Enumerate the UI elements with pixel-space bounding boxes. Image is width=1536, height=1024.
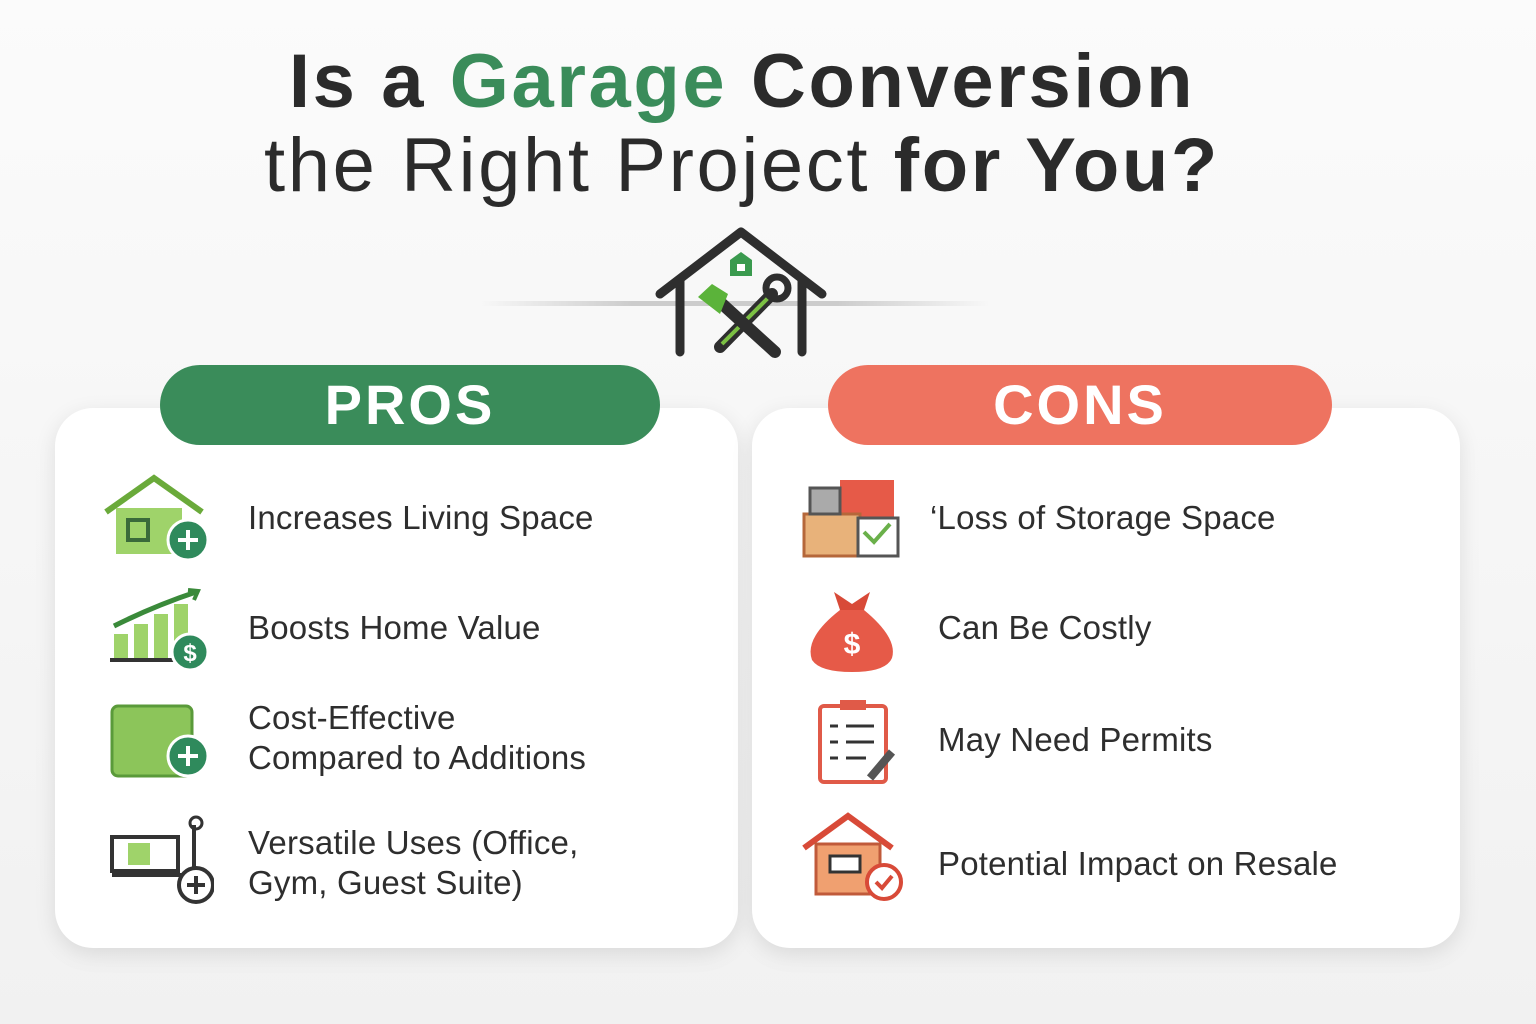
cons item 4	[802, 812, 1338, 901]
cons item 1: ‘Loss of Storage Space	[930, 499, 1276, 536]
panel: cons	[752, 408, 1460, 948]
pros header	[160, 365, 660, 445]
pros item 3	[110, 699, 586, 778]
cons item 1	[802, 480, 1276, 558]
cons item 3: May Need Permits	[938, 721, 1213, 758]
pros item 1	[104, 474, 594, 558]
title: Is a Garage Conversion	[289, 39, 1195, 124]
title	[264, 39, 1220, 208]
pros header: PROS	[325, 373, 495, 436]
icon: garage with tools	[656, 227, 826, 358]
pros item 2: $	[183, 640, 197, 667]
cons header	[828, 365, 1332, 445]
cons item 2	[810, 592, 1152, 672]
pros item 1: Increases Living Space	[248, 499, 594, 536]
pros item 3: Cost-Effective	[248, 699, 456, 736]
cons item 3	[818, 700, 1213, 784]
divider line	[480, 301, 990, 306]
pros item 2	[110, 588, 541, 668]
cons item 4: Potential Impact on Resale	[938, 845, 1338, 882]
panel: pros	[55, 408, 738, 948]
cons item 2: Can Be Costly	[938, 609, 1152, 646]
cons header: CONS	[993, 373, 1167, 436]
cons item 2: $	[844, 628, 861, 661]
pros item 4: Gym, Guest Suite)	[248, 864, 523, 901]
pros item 3: Compared to Additions	[248, 739, 586, 776]
pros item 4: Versatile Uses (Office,	[248, 824, 578, 861]
pros item 4	[110, 816, 578, 904]
title: the Right Project for You?	[264, 123, 1220, 208]
pros item 2: Boosts Home Value	[248, 609, 541, 646]
